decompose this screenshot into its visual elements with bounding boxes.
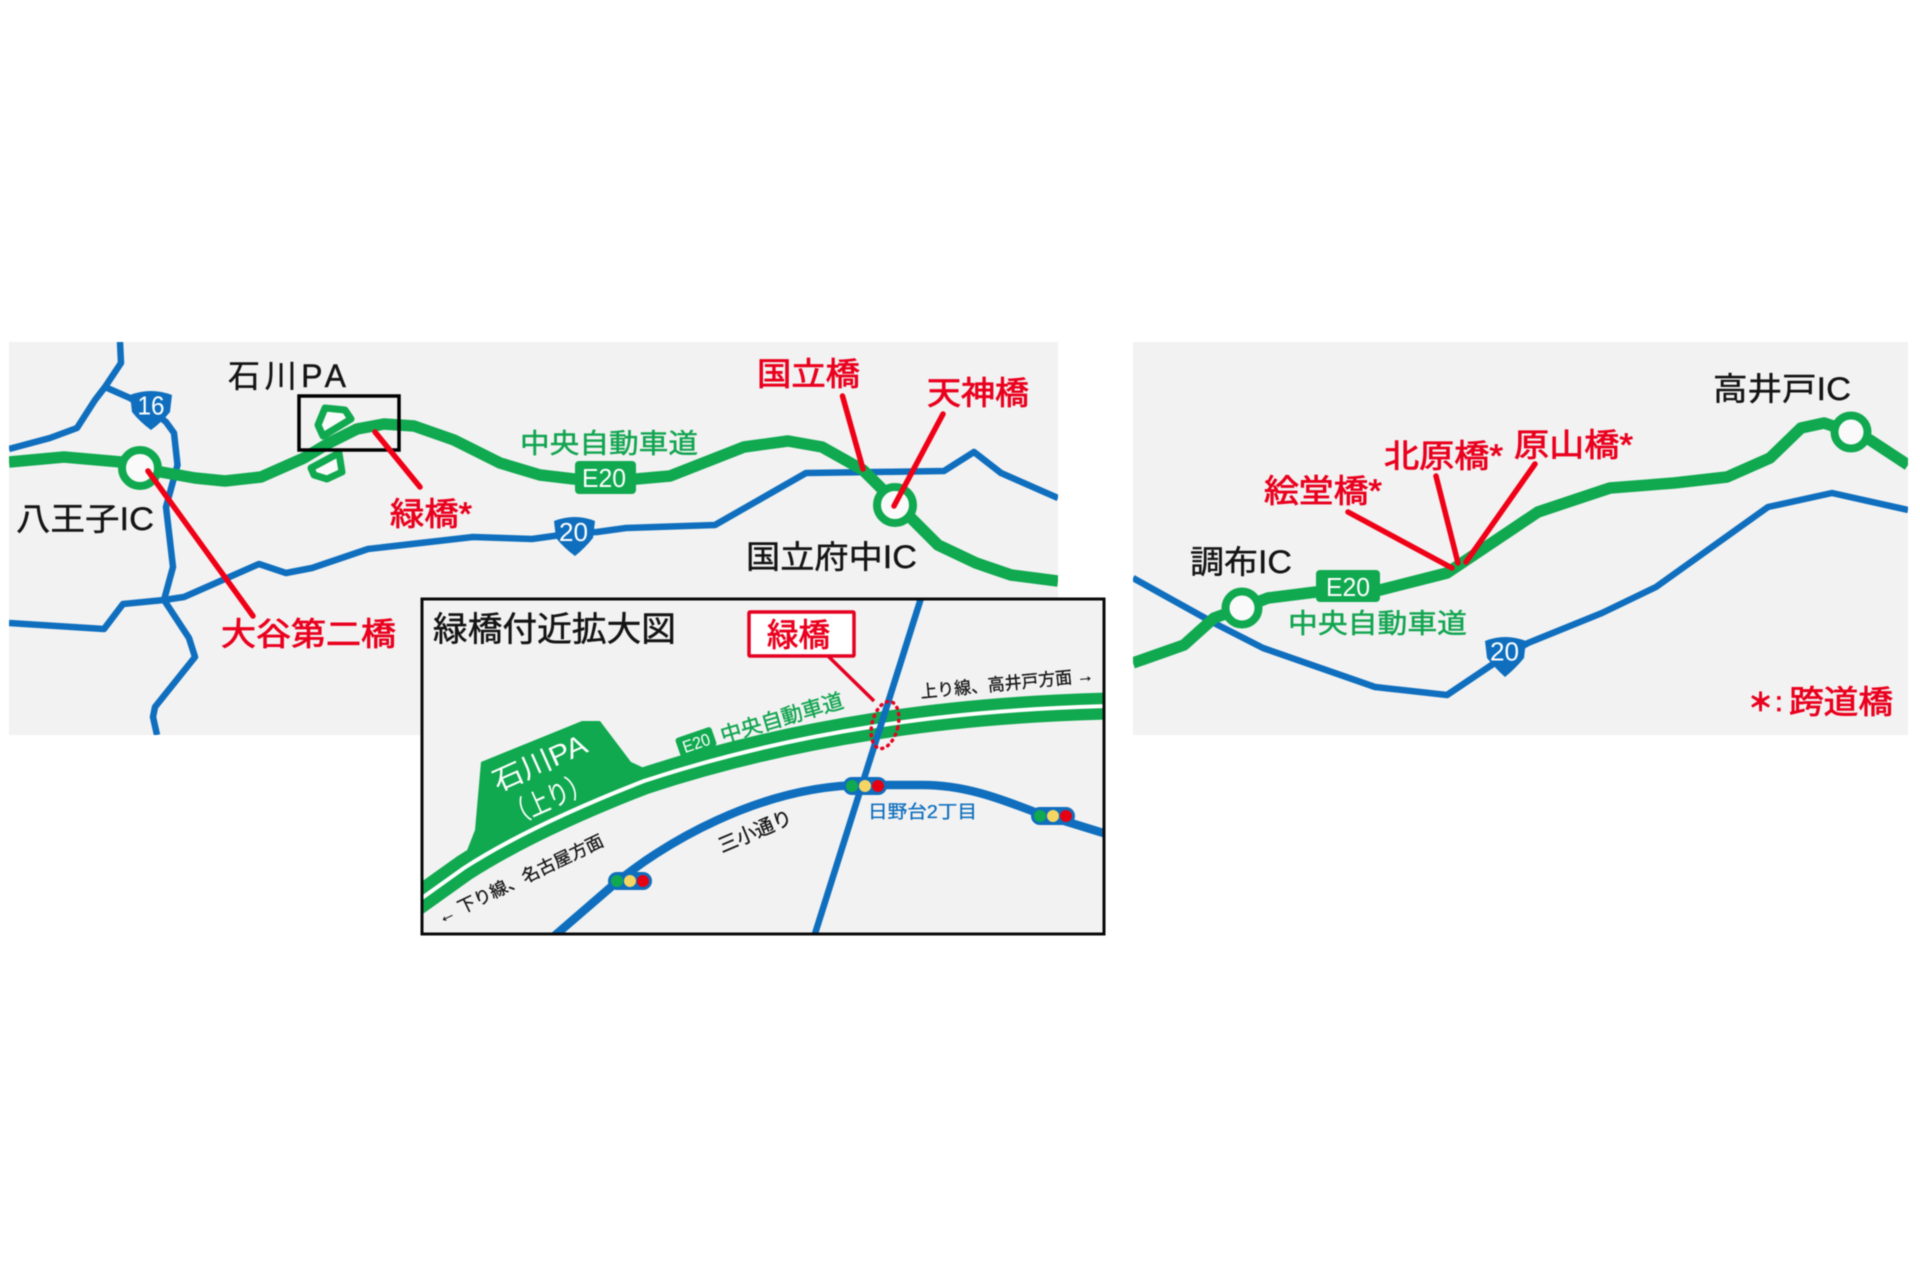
blue road, right map xyxy=(1133,493,1908,695)
leader line: inset Midori bridge xyxy=(827,655,874,701)
label: up line parenthesis: （上り） xyxy=(502,767,595,831)
Chuo Expressway line, left map xyxy=(9,424,1058,581)
route shield 16 xyxy=(130,390,172,430)
route shield 20 left: 20 xyxy=(559,517,588,547)
callout box: Midori bridge: 緑橋 xyxy=(767,617,830,653)
label: Takaido IC: 高井戸IC xyxy=(1713,371,1851,407)
blue local roads, left map xyxy=(9,342,1058,735)
interchange: Takaido IC xyxy=(1834,416,1868,448)
small badge E20: E20 xyxy=(680,730,713,757)
leader line: Otani No.2 bridge xyxy=(148,471,253,616)
route shield 20 right xyxy=(1485,636,1526,677)
expressway center white line xyxy=(415,706,1110,903)
badge E20 left xyxy=(575,461,636,494)
traffic light left xyxy=(608,872,652,890)
interchange: Kunitachi-Fuchu IC xyxy=(877,487,913,523)
label: Kunitachi bridge: 国立橋 xyxy=(757,356,860,392)
Ishikawa PA area xyxy=(466,720,643,850)
Chuo Expressway line, right map xyxy=(1133,423,1908,663)
label: Ishikawa PA up: 石川PA xyxy=(488,728,592,797)
callout box: Midori bridge xyxy=(749,612,854,656)
legend: overpass asterisk: ＊ xyxy=(1748,689,1773,717)
dotted bridge marker xyxy=(868,699,902,751)
legend: overpass asterisk: : xyxy=(1775,686,1783,717)
badge E20 right xyxy=(1316,570,1380,602)
badge E20 right: E20 xyxy=(1326,572,1370,602)
label: Kunitachi-Fuchu IC: 国立府中IC xyxy=(746,539,917,575)
interchange: Hachioji IC xyxy=(122,450,158,486)
label: Midori bridge: 緑橋* xyxy=(390,496,472,532)
inset border xyxy=(422,599,1104,934)
leader line: Kunitachi bridge xyxy=(842,396,863,469)
crossing road xyxy=(813,595,922,940)
traffic light center xyxy=(843,777,887,795)
label: Edo bridge: 絵堂橋* xyxy=(1264,473,1382,509)
leader line: Edo bridge xyxy=(1348,512,1452,568)
label: up direction: 上り線、高井戸方面 → xyxy=(919,665,1095,702)
label: Chuo Expressway left: 中央自動車道 xyxy=(520,429,698,459)
label: Hinodai 2-chome: 日野台2丁目 xyxy=(868,802,977,822)
Ishikawa PA highlight box xyxy=(299,396,399,450)
label: Chuo Expressway right: 中央自動車道 xyxy=(1288,609,1467,639)
Sansho-dori road xyxy=(552,785,1110,938)
leader line: Harayama bridge xyxy=(1466,464,1535,562)
label: Tenjin bridge: 天神橋 xyxy=(927,375,1029,411)
route shield 16: 16 xyxy=(138,390,164,420)
label: down direction: ← 下り線、名古屋方面 xyxy=(434,831,607,928)
route shield 20 right: 20 xyxy=(1490,636,1519,666)
label: Otani No.2 bridge: 大谷第二橋 xyxy=(221,616,396,652)
inset title: 緑橋付近拡大図 xyxy=(433,611,676,649)
panel: right map Chofu to Takaido xyxy=(1133,342,1908,735)
expressway green band xyxy=(415,706,1110,903)
Ishikawa PA loop upper xyxy=(318,408,351,436)
Ishikawa PA loop lower xyxy=(311,453,342,479)
label: Chuo Expressway inset: 中央自動車道 xyxy=(718,690,846,748)
leader line: Midori bridge xyxy=(375,432,420,487)
inset map drawing xyxy=(415,595,1110,940)
label: Harayama bridge: 原山橋* xyxy=(1514,427,1633,463)
label: Sansho-dori: 三小通り xyxy=(715,806,796,858)
legend: overpass asterisk: 跨道橋 xyxy=(1789,684,1893,720)
badge E20 left: E20 xyxy=(582,463,626,493)
leader line: Kitahara bridge xyxy=(1436,476,1458,563)
traffic light right xyxy=(1031,807,1075,825)
leader line: Tenjin bridge xyxy=(894,414,943,506)
panel: left map Hachioji to Kunitachi-Fuchu xyxy=(9,342,1058,735)
interchange: Chofu IC xyxy=(1226,592,1258,624)
label: Ishikawa PA: 石川PA xyxy=(228,358,347,394)
label: Chofu IC: 調布IC xyxy=(1190,544,1292,580)
label: Kitahara bridge: 北原橋* xyxy=(1384,438,1503,474)
label: Hachioji IC: 八王子IC xyxy=(16,501,154,537)
panel: inset enlarged map near Midori bridge xyxy=(415,595,1110,940)
route shield 20 left xyxy=(554,517,595,556)
